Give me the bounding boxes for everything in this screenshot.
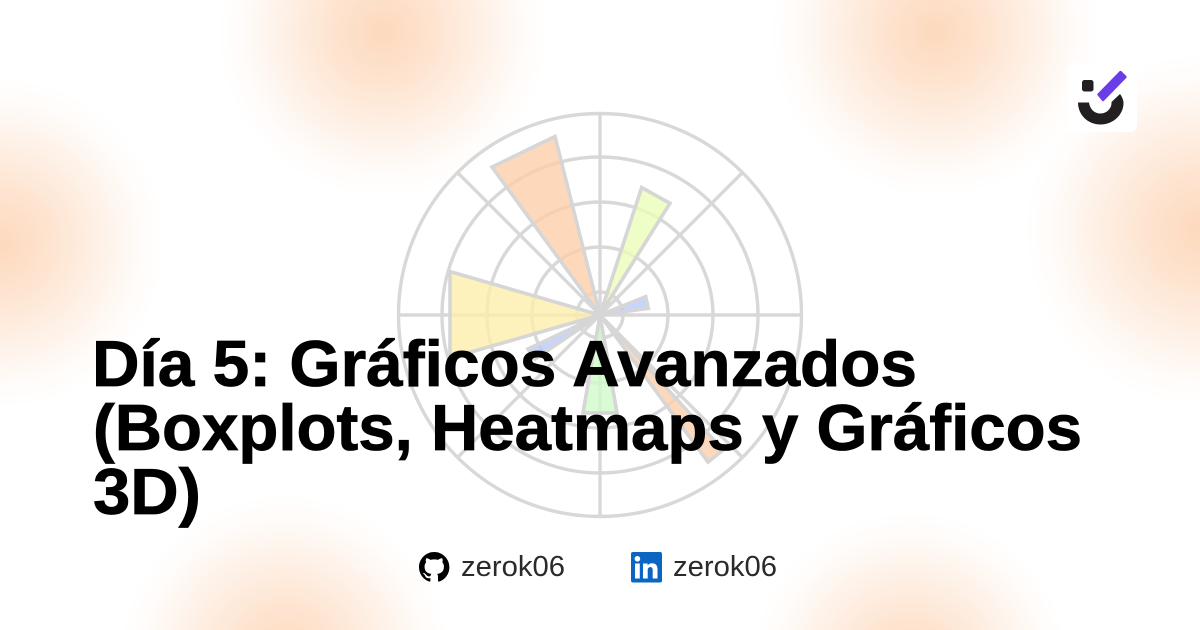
title: (Boxplots, Heatmaps y Gráficos bbox=[93, 391, 1082, 464]
logo dot bbox=[1082, 80, 1094, 92]
logo tile bbox=[1068, 63, 1137, 132]
wedge: green bottom bbox=[583, 315, 617, 413]
wedge: lime upper right bbox=[600, 188, 670, 315]
github handle bbox=[419, 551, 565, 583]
title: Día 5: Gráficos Avanzados bbox=[92, 327, 917, 400]
title bbox=[92, 327, 1082, 528]
linkedin handle bbox=[631, 551, 777, 583]
logo smile bbox=[1078, 94, 1124, 124]
wedge: blue right bbox=[600, 297, 648, 315]
icon: github bbox=[419, 552, 449, 582]
github username: zerok06 bbox=[461, 551, 565, 583]
title: 3D) bbox=[93, 455, 201, 528]
wedge: blue lower left bbox=[528, 315, 600, 359]
wedge: yellow left bbox=[450, 272, 600, 358]
polar chart illustration bbox=[398, 114, 802, 516]
logo bbox=[1068, 63, 1137, 132]
wedge: orange upper left bbox=[492, 136, 600, 315]
logo check stroke bbox=[1098, 72, 1126, 100]
icon: linkedin bbox=[631, 552, 662, 582]
wedge: orange lower right bbox=[600, 315, 723, 462]
polar grid bbox=[398, 114, 802, 516]
linkedin username: zerok06 bbox=[673, 551, 777, 583]
